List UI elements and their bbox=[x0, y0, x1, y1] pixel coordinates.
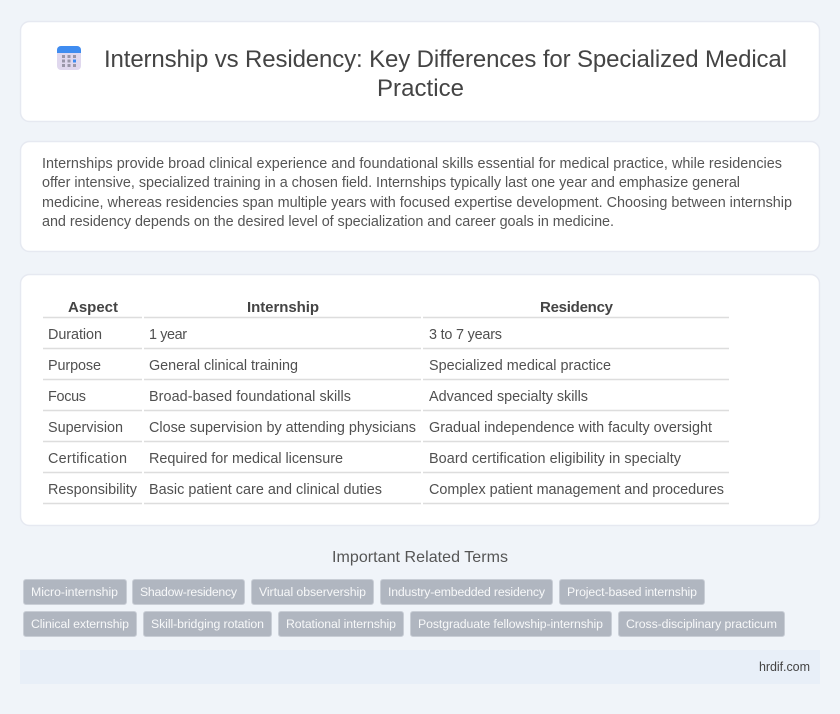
row: supervision: Supervision bbox=[48, 420, 123, 436]
intro paragraph: Internships provide broad clinical experience and foundational skills essential for medical practice, while residencies bbox=[42, 156, 782, 172]
tag bbox=[24, 580, 126, 604]
row: certification: Board certification eligibility in specialty bbox=[429, 451, 682, 467]
row: certification bbox=[48, 451, 682, 467]
row: focus: Focus bbox=[48, 389, 86, 405]
heading: related terms: Important Related Terms bbox=[332, 549, 508, 566]
row: purpose: Purpose bbox=[48, 358, 101, 374]
tag: Shadow-residency bbox=[140, 585, 238, 599]
icon: calendar bbox=[57, 46, 81, 70]
intro paragraph: and residency depends on the desired level of specialization and career goals in medicine. bbox=[42, 214, 614, 230]
tag bbox=[24, 612, 136, 636]
tags: related terms bbox=[24, 580, 784, 636]
row: certification: Certification bbox=[48, 451, 127, 467]
row: duration: Duration bbox=[48, 327, 102, 343]
row: duration bbox=[48, 327, 502, 343]
tag: Project-based internship bbox=[567, 585, 697, 599]
row: certification: Required for medical licensure bbox=[149, 451, 343, 467]
tag bbox=[252, 580, 374, 604]
title text: Internship vs Residency: Key Differences for Specialized Medical bbox=[104, 46, 787, 73]
row: supervision bbox=[48, 420, 712, 436]
intro paragraph: offer intensive, specialized training in a chosen field. Internships typically last one year and emphasize general bbox=[42, 175, 740, 191]
tag: Virtual observership bbox=[259, 585, 366, 599]
footer bbox=[20, 650, 820, 684]
tag bbox=[618, 612, 784, 636]
row: focus bbox=[48, 389, 588, 405]
tag: Industry-embedded residency bbox=[388, 585, 546, 599]
tag: Skill-bridging rotation bbox=[151, 617, 264, 631]
row: supervision: Gradual independence with faculty oversight bbox=[429, 420, 712, 436]
row: purpose: Specialized medical practice bbox=[429, 358, 611, 374]
tag: Rotational internship bbox=[286, 617, 396, 631]
tag: Cross-disciplinary practicum bbox=[626, 617, 777, 631]
table header bbox=[68, 299, 614, 316]
row: focus: Broad-based foundational skills bbox=[149, 389, 351, 405]
row: purpose bbox=[48, 358, 611, 374]
row: focus: Advanced specialty skills bbox=[429, 389, 588, 405]
panel: comparison table bbox=[20, 274, 820, 526]
tag bbox=[380, 580, 552, 604]
table header: Aspect bbox=[68, 299, 118, 316]
row: responsibility: Basic patient care and clinical duties bbox=[149, 482, 382, 498]
tag bbox=[560, 580, 704, 604]
row: responsibility: Responsibility bbox=[48, 482, 138, 498]
table header: Internship bbox=[247, 299, 319, 316]
intro paragraph: medicine, whereas residencies span multiple years with focused expertise development. Choosing between internship bbox=[42, 195, 792, 211]
tag bbox=[144, 612, 272, 636]
row: purpose: General clinical training bbox=[149, 358, 298, 374]
row: supervision: Close supervision by attending physicians bbox=[149, 420, 416, 436]
row: duration: 3 to 7 years bbox=[429, 327, 502, 343]
tag: Micro-internship bbox=[31, 585, 118, 599]
panel: introduction bbox=[20, 142, 820, 252]
tag bbox=[410, 612, 612, 636]
row: responsibility bbox=[48, 482, 724, 498]
row: duration: 1 year bbox=[149, 327, 187, 343]
tag bbox=[278, 612, 404, 636]
tag: Postgraduate fellowship-internship bbox=[418, 617, 603, 631]
footer site name: hrdif.com bbox=[759, 660, 810, 674]
tag bbox=[132, 580, 244, 604]
title text: Practice bbox=[377, 75, 464, 102]
row: responsibility: Complex patient management and procedures bbox=[429, 482, 724, 498]
table header: Residency bbox=[540, 299, 614, 316]
panel: title bbox=[20, 22, 820, 122]
tag: Clinical externship bbox=[31, 617, 129, 631]
